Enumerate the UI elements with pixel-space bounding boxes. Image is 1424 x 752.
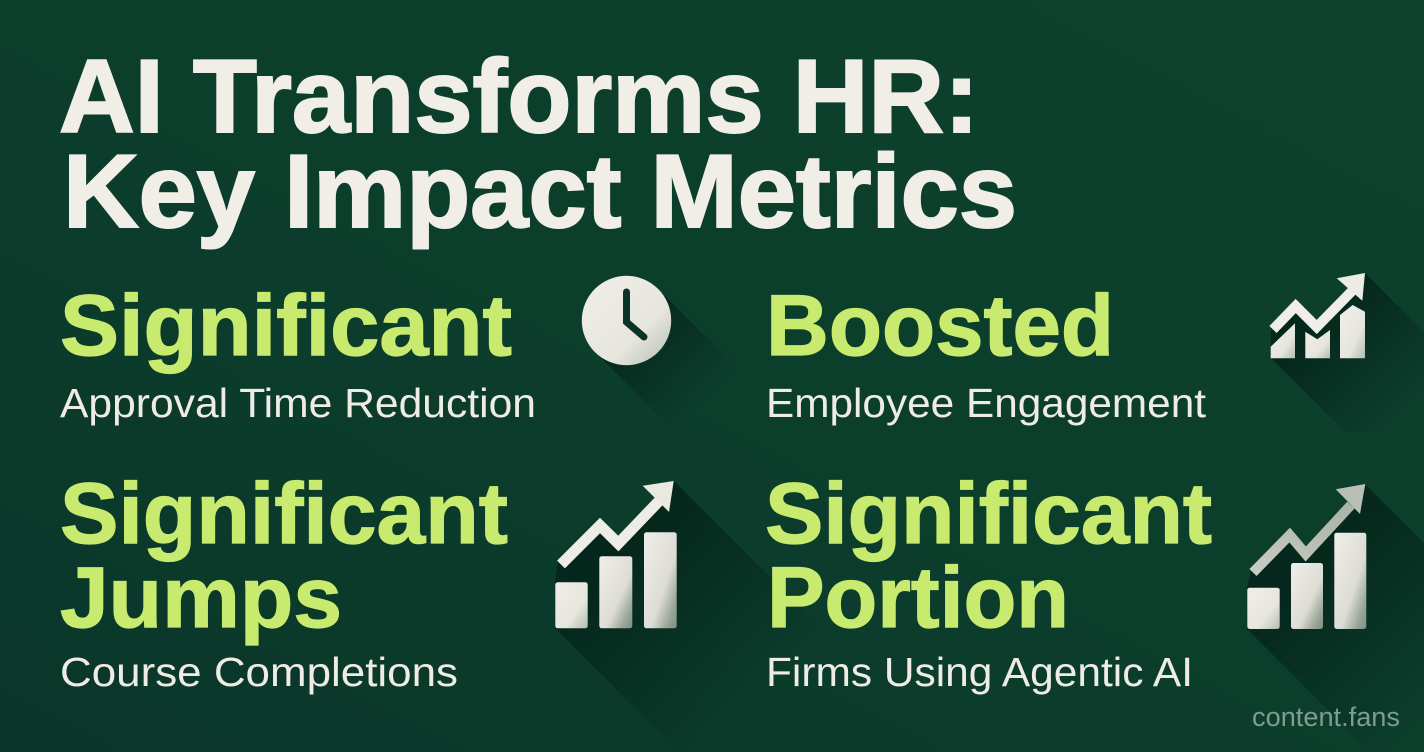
heading: Significant Jumps: Jumps (60, 550, 342, 646)
icon: bar chart with arrow, muted (1247, 484, 1424, 752)
heading: Significant Portion: Significant (765, 466, 1212, 562)
icon: bar chart with arrow (555, 481, 834, 752)
panel: approval time (60, 276, 758, 452)
heading: Significant Portion (765, 466, 1212, 646)
panel: employee engagement (766, 273, 1424, 432)
title (59, 39, 1017, 250)
heading: Significant Jumps: Significant (60, 466, 508, 562)
heading: Significant Portion: Portion (767, 550, 1069, 646)
panel: course completions (60, 466, 834, 752)
label: Firms Using Agentic AI: Firms Using Agentic AI (766, 649, 1193, 695)
title: AI Transforms HR: (59, 39, 979, 155)
panel: agentic AI firms (765, 466, 1424, 752)
label: Approval Time Reduction: Approval Time Reduction (60, 380, 536, 426)
label: Course Completions: Course Completions (60, 649, 458, 695)
heading: Significant: Significant (60, 278, 512, 374)
label: Employee Engagement: Employee Engagement (766, 380, 1207, 426)
heading: Significant Jumps (60, 466, 508, 646)
icon: growth chart with arrow (1271, 273, 1424, 432)
title: Key Impact Metrics (63, 134, 1017, 250)
heading: Boosted: Boosted (766, 278, 1114, 374)
icon: clock (582, 276, 758, 452)
watermark: content.fans: content.fans (1252, 702, 1400, 732)
